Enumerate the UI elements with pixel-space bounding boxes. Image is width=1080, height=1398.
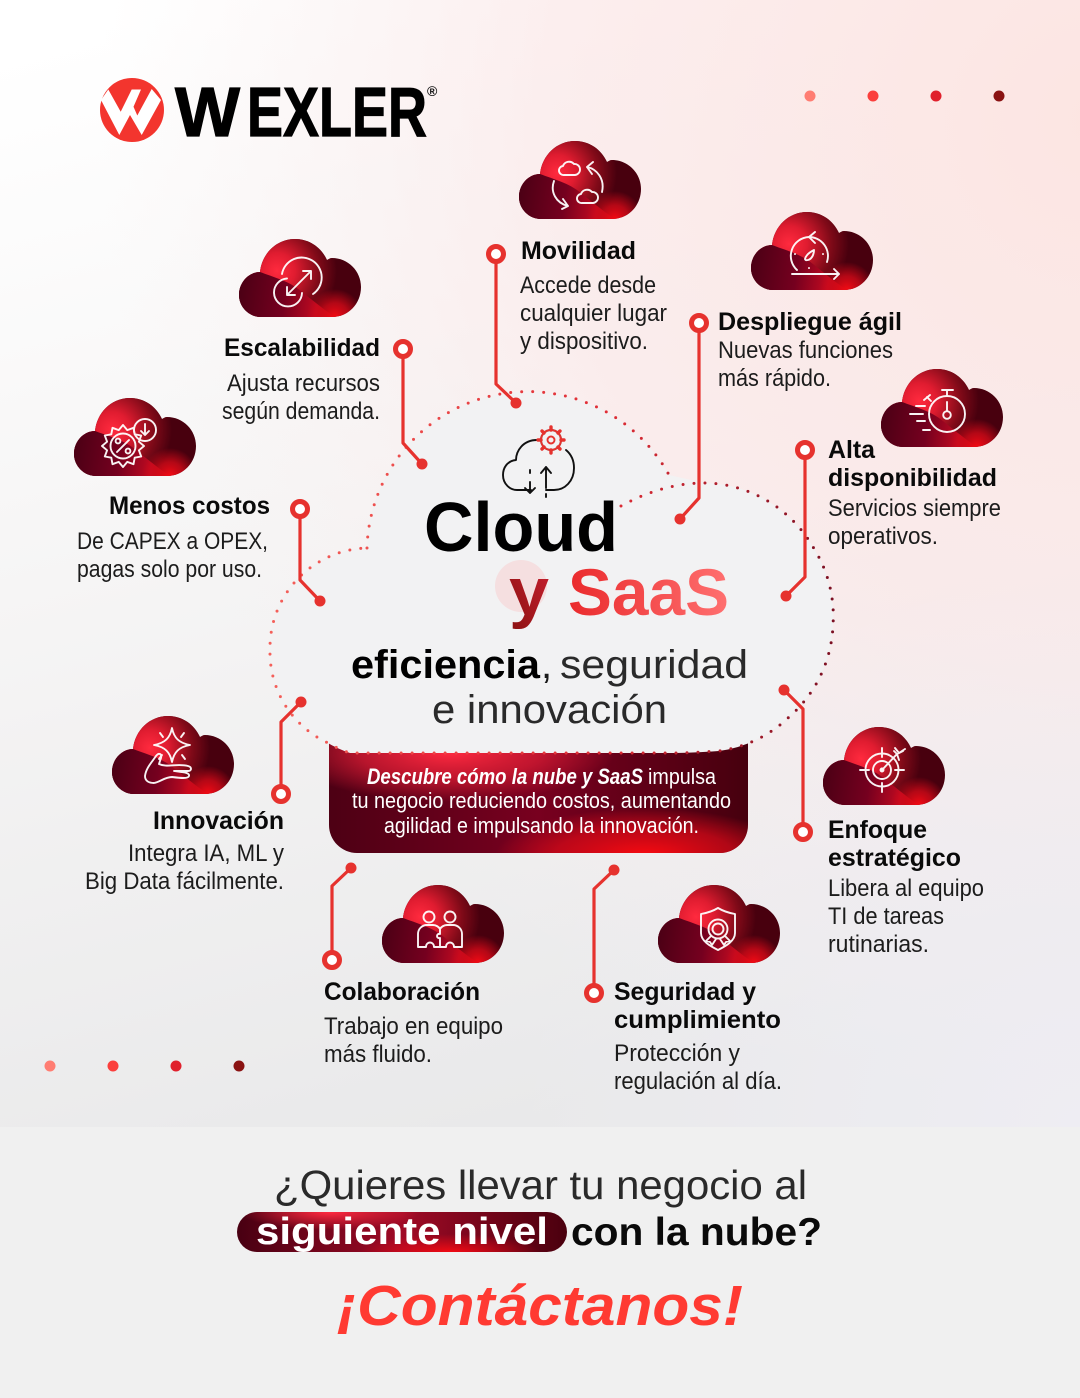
body text: cualquier lugar: [520, 300, 667, 327]
icon: innovation cloud: [112, 716, 234, 794]
icon: scalability cloud: [239, 239, 361, 317]
central cloud fill: [270, 392, 833, 753]
connector: [780, 442, 812, 602]
CTA second line: con la nube?: [571, 1211, 822, 1254]
body text: Ajusta recursos: [227, 370, 380, 397]
heading: [828, 816, 961, 872]
heading: Enfoque: [828, 816, 927, 844]
CTA question line: ¿Quieres llevar tu negocio al: [274, 1162, 807, 1208]
title: y SaaS: y: [509, 554, 549, 630]
connector: [274, 696, 306, 802]
panel: Escalabilidad: [222, 239, 428, 470]
heading: Despliegue ágil: [718, 308, 902, 336]
connector: [674, 316, 706, 524]
description text: agilidad e impulsando la innovación.: [384, 813, 699, 838]
heading: estratégico: [828, 844, 961, 872]
description text: [352, 764, 731, 838]
description text: tu negocio reduciendo costos, aumentando: [352, 788, 731, 813]
panel: Enfoque estratégico: [778, 684, 984, 958]
body text: Protección y: [614, 1040, 740, 1067]
panel: Seguridad y cumplimiento: [586, 864, 782, 1095]
icon: cloud with gear and arrows: [503, 427, 574, 497]
icon: target cloud: [823, 727, 945, 805]
logo wordmark: [175, 73, 427, 151]
connector: [586, 864, 620, 1000]
heading: disponibilidad: [828, 464, 997, 492]
icon: logo mark: [100, 78, 164, 142]
panel: Alta disponibilidad: [780, 369, 1003, 602]
heading: Menos costos: [109, 492, 270, 520]
icon: security cloud: [658, 885, 780, 963]
subtitle: eficiencia: [351, 643, 541, 687]
heading: Alta: [828, 436, 876, 464]
footer band: [0, 1127, 1080, 1398]
body text: más fluido.: [324, 1041, 432, 1068]
logo wordmark: W: [175, 73, 240, 151]
body text: [828, 875, 984, 958]
body text: De CAPEX a OPEX,: [77, 528, 268, 555]
body text: Nuevas funciones: [718, 337, 893, 364]
heading: [614, 978, 781, 1034]
body text: Libera al equipo: [828, 875, 984, 902]
body text: según demanda.: [222, 398, 380, 425]
heading: Innovación: [153, 807, 284, 835]
icon: cost reduction cloud: [74, 398, 196, 476]
call to action: [237, 1162, 822, 1338]
heading: [828, 436, 997, 492]
body text: [85, 840, 284, 895]
CTA pill highlight: [237, 1212, 567, 1252]
body text: pagas solo por uso.: [77, 556, 262, 583]
panel: Colaboración: [324, 862, 504, 1068]
body text: más rápido.: [718, 365, 831, 392]
body text: [614, 1040, 782, 1095]
heading: Movilidad: [521, 237, 636, 265]
body text: [77, 528, 268, 583]
panel: Movilidad: [488, 141, 667, 408]
panel: Despliegue ágil: [674, 212, 902, 524]
body text: Servicios siempre: [828, 495, 1001, 522]
body text: TI de tareas: [828, 903, 944, 930]
heading: Seguridad y: [614, 978, 756, 1006]
body text: [222, 370, 380, 425]
body text: rutinarias.: [828, 931, 929, 958]
CTA highlighted words: siguiente nivel: [256, 1211, 548, 1253]
connector: [396, 342, 428, 470]
body text: Big Data fácilmente.: [85, 868, 284, 895]
connector: [292, 502, 326, 606]
icon: collaboration cloud: [382, 885, 504, 963]
connector: [778, 684, 810, 840]
decorative dots: top right: [804, 90, 1004, 102]
logo wordmark: EXLER: [247, 73, 427, 151]
heading: Colaboración: [324, 978, 480, 1006]
subtitle: e innovación: [432, 688, 667, 732]
logo: Wexler: [100, 73, 438, 151]
body text: [520, 272, 667, 355]
body text: [324, 1013, 503, 1068]
title accent circle: [495, 560, 547, 612]
body text: Accede desde: [520, 272, 656, 299]
central cloud dotted outline: [270, 392, 833, 753]
subtitle: [351, 643, 748, 732]
body text: Integra IA, ML y: [128, 840, 284, 867]
description text: Descubre cómo la nube y SaaS: [367, 764, 643, 789]
subtitle: seguridad: [560, 643, 748, 687]
body text: regulación al día.: [614, 1068, 782, 1095]
body text: [718, 337, 893, 392]
icon: stopwatch cloud: [881, 369, 1003, 447]
connector: [488, 246, 522, 408]
title: y SaaS: SaaS: [568, 555, 729, 629]
icon: agile deployment cloud: [751, 212, 873, 290]
description text: impulsa: [648, 764, 717, 789]
body text: y dispositivo.: [520, 328, 648, 355]
title: Cloud: Cloud: [424, 488, 618, 566]
body text: operativos.: [828, 523, 938, 550]
heading: cumplimiento: [614, 1006, 781, 1034]
body text: Trabajo en equipo: [324, 1013, 503, 1040]
heading: Escalabilidad: [224, 334, 380, 362]
CTA contact heading: ¡Contáctanos!: [337, 1274, 743, 1338]
decorative dots: bottom left: [44, 1060, 244, 1072]
registered mark: ®: [427, 83, 438, 99]
panel: Menos costos: [74, 398, 326, 606]
panel: Innovación: [85, 696, 306, 895]
body text: [828, 495, 1001, 550]
icon: mobility cloud: [519, 141, 641, 219]
connector: [324, 862, 356, 968]
panel: red description box background: [329, 735, 748, 853]
subtitle: ,: [541, 643, 552, 687]
